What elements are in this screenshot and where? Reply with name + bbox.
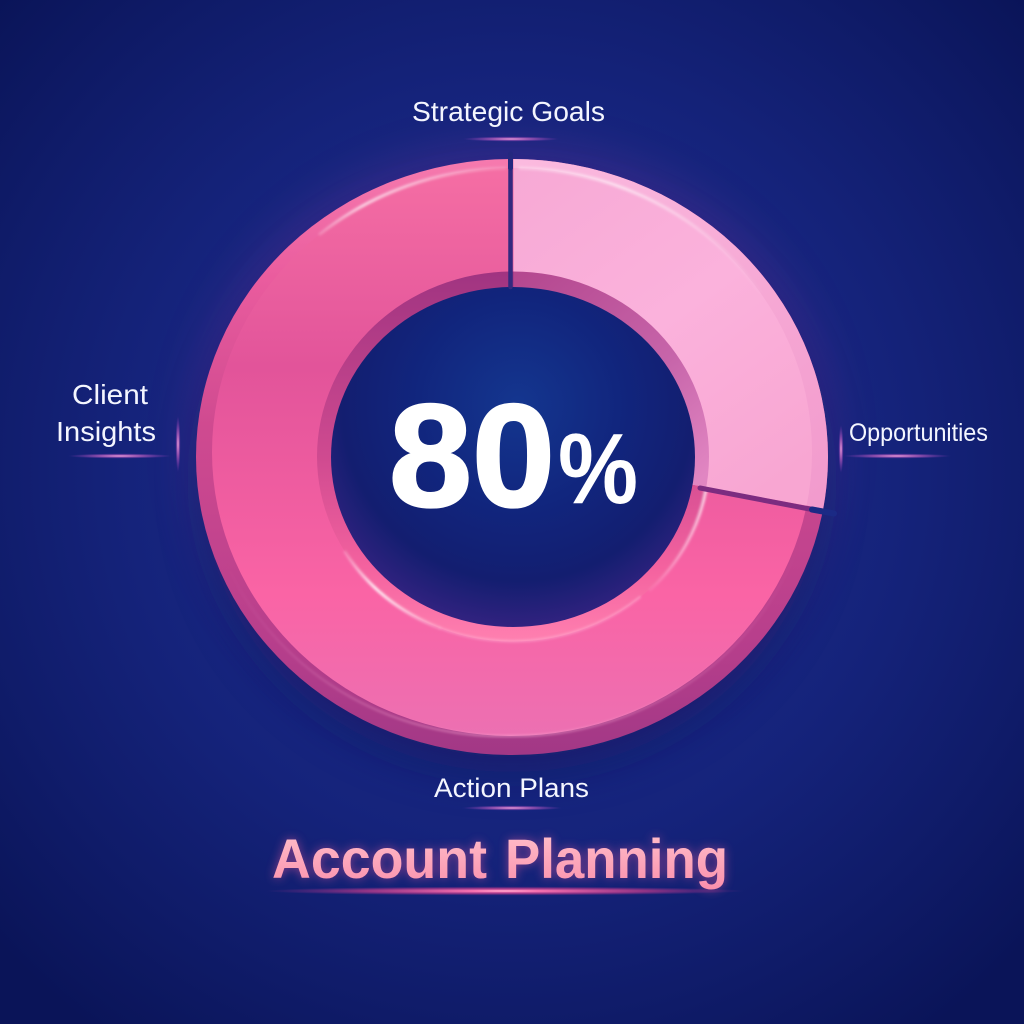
label: opportunities: Opportunities — [849, 419, 988, 447]
title: Planning — [505, 827, 728, 890]
label: action plans: Action Plans — [434, 773, 589, 803]
highlight: inner lower arcs — [345, 489, 706, 641]
title: Planning — [505, 827, 728, 890]
segment gap: top — [508, 154, 513, 287]
ring glow — [190, 147, 834, 743]
centre value: 80 — [389, 374, 555, 537]
label: strategic goals: Strategic Goals — [412, 96, 605, 127]
centre value: % — [558, 413, 638, 525]
donut chart — [196, 154, 834, 755]
segment gap: right — [700, 488, 834, 514]
label: opportunities — [838, 419, 988, 473]
centre hole — [331, 287, 695, 627]
label: client insights — [56, 379, 180, 472]
title: Account — [272, 827, 487, 890]
highlight: outer top arcs — [225, 168, 800, 736]
ring shadow — [202, 188, 822, 772]
title — [265, 827, 745, 896]
title: Account — [272, 827, 487, 890]
label: client insights: Insights — [56, 416, 156, 447]
label: client insights: Client — [72, 379, 148, 410]
centre value — [389, 374, 638, 537]
label: strategic goals — [412, 96, 605, 142]
segment: client insights and action plans (80% base) — [196, 159, 828, 755]
segment: opportunities (light pink) — [514, 159, 828, 508]
